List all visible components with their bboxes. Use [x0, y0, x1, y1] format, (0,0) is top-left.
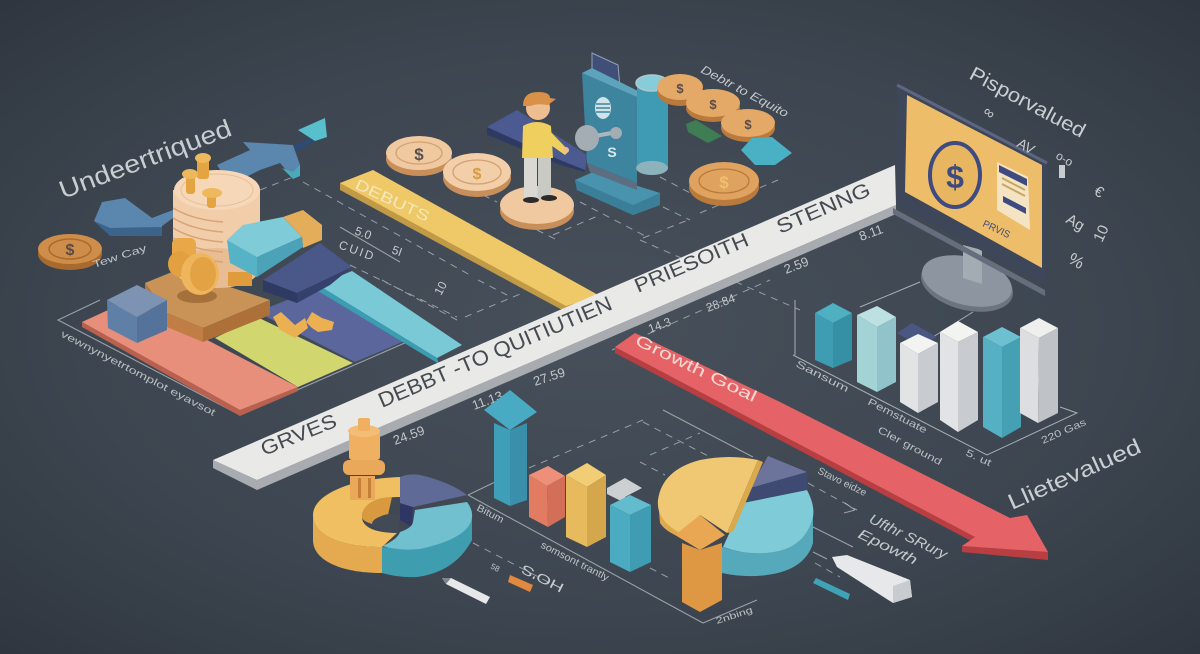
arrow upper section: [217, 142, 300, 185]
arrow tail head pointing left: [94, 198, 173, 236]
bar 2: [857, 306, 896, 392]
caption: chart numbers: 10: [431, 279, 450, 297]
icon: teal folded block: [227, 210, 322, 277]
bottom numbers: 24.59: [391, 423, 427, 448]
icon: person on coin: [500, 92, 574, 230]
arrow navy neck: [293, 133, 323, 151]
yellow band: Debuts: DEBUTS: [352, 176, 432, 225]
right chart captions: 5. ut: [964, 448, 993, 469]
coins right of machine: [657, 74, 775, 206]
icon: coin stack: [168, 153, 260, 303]
right chart captions: [794, 359, 1088, 469]
bottom bar chart: [484, 390, 651, 572]
solid axis lines: [58, 227, 855, 623]
coins right of machine: $: [709, 97, 717, 112]
icon: left coin: [38, 234, 102, 270]
monitor side glyphs: ∞: [979, 103, 999, 123]
band numbers: 8.11: [857, 221, 885, 244]
bottom chart captions: somsont trantly: [539, 540, 610, 584]
caption: chart numbers: [337, 224, 450, 297]
monitor side glyphs: Ag: [1063, 211, 1087, 235]
bottom chart captions: Bitum: [475, 503, 505, 526]
caption: Tew Cay: Tew Cay: [92, 243, 148, 271]
pencil icons: [442, 575, 533, 604]
band numbers: 28.84: [704, 291, 737, 315]
icon: small green and teal pieces: [686, 120, 792, 165]
bottom chart footer text: 2nbing: [715, 605, 754, 626]
label: Undervalued: Llietevalued: [1004, 434, 1145, 515]
bottom numbers: 27.59: [531, 365, 567, 389]
stepped navy block: [263, 243, 352, 303]
monitor side glyphs: €: [1091, 183, 1107, 202]
monitor side glyphs: o-o: [1054, 148, 1076, 169]
orange plinth: [145, 270, 270, 342]
icon: blue tray: [487, 110, 587, 172]
gold trinkets on stack: [182, 153, 222, 208]
coins row: $: [414, 145, 424, 164]
band numbers: [646, 221, 885, 336]
bar 1: [815, 303, 852, 368]
bar 5: [983, 327, 1021, 438]
lime slab: [215, 317, 353, 387]
coins right of machine: $: [719, 173, 729, 192]
main white diagonal band: DEBBT -TO QUITIUTIEN: [375, 292, 616, 413]
label: Overvalued: Pisporvalued: [966, 63, 1089, 143]
orange arrow: [675, 515, 725, 612]
coins right of machine: $: [744, 117, 752, 132]
yellow band: Debuts: [340, 170, 600, 312]
main white diagonal band: PRIESOITH: [631, 229, 752, 298]
arrow teal tip: [298, 118, 327, 141]
main white diagonal band: STENNG: [773, 179, 874, 239]
right chart captions: 220 Gas: [1040, 417, 1088, 447]
coins row: [386, 136, 511, 197]
monitor side glyphs: AV: [1014, 135, 1038, 158]
gold pile: [168, 238, 252, 303]
caption: Debt to Equity: Debtr to Equito: [699, 62, 791, 120]
arrow teal accent: [282, 165, 300, 179]
bottom numbers: [391, 365, 567, 448]
blue cube: [107, 285, 167, 343]
icon: small gold pieces: [273, 312, 334, 338]
bottom chart captions: [475, 503, 610, 584]
red arrow: Growth Goal: Growth Goal: [632, 332, 759, 406]
icon: monitor: PRVIS: [981, 219, 1012, 241]
right chart captions: Sansum: [794, 359, 850, 395]
rocket and pen icons: [813, 555, 912, 603]
navy slab: [257, 288, 407, 362]
right bar chart: [793, 282, 1077, 455]
icon: teal machine: [575, 53, 668, 215]
main white diagonal band: [213, 165, 896, 490]
caption: Ultra-Slurry Growth: [856, 510, 951, 568]
navy slab behind: [897, 323, 937, 347]
donut chart left: [313, 474, 472, 577]
caption: Ultra-Slurry Growth: Ufthr SRury: [867, 510, 951, 562]
caption: Save rate: Stavo eidze: [816, 466, 869, 499]
icon: teal machine: S: [607, 144, 617, 160]
caption: upside-down HOS: HO'S: [518, 561, 566, 596]
bar 4: [940, 321, 978, 432]
coins row: $: [473, 166, 482, 183]
caption: chart numbers: 5I: [390, 243, 404, 259]
band numbers: 14.3: [646, 315, 673, 336]
teal bar: [610, 495, 651, 572]
yellow bar: [566, 463, 606, 547]
monitor side glyphs: %: [1065, 249, 1088, 273]
caption: small 58: 58: [489, 562, 502, 574]
red bar: [529, 466, 565, 527]
caption: left axis text: vewnynyetrtomplot eyavsot: [59, 329, 217, 419]
icon: left coin: $: [66, 242, 75, 259]
band numbers: 2.59: [782, 254, 811, 277]
caption: Ultra-Slurry Growth: Epowth: [856, 525, 920, 568]
icon: monitor: [893, 85, 1047, 321]
icon: orange tower: [343, 418, 385, 500]
coins right of machine: $: [676, 81, 684, 96]
bar 3: [900, 334, 938, 413]
monitor stand: [915, 245, 1019, 321]
left chart base: coloured platform: [82, 243, 462, 416]
right chart captions: Pemstuate: [866, 397, 929, 436]
up arrow: [484, 390, 537, 506]
monitor side glyphs: [979, 103, 1113, 273]
arrow: blue underpriced: [94, 118, 327, 236]
icon: monitor: $: [946, 159, 964, 195]
caption: chart numbers: 5.0: [353, 224, 374, 243]
pie chart right: [658, 456, 813, 576]
bottom numbers: 11.13: [470, 388, 505, 413]
dashed guide lines: [260, 177, 857, 583]
red arrow: Growth Goal: [615, 332, 1048, 560]
red slab: [82, 322, 298, 416]
right chart captions: Cler ground: [876, 425, 943, 468]
teal slab: [318, 271, 462, 358]
monitor side glyphs: 10: [1090, 222, 1113, 245]
bar 6: [1020, 318, 1058, 423]
main white diagonal band: GRVES: [258, 410, 340, 461]
caption: chart numbers: CUID: [337, 238, 376, 263]
grey piece: [607, 478, 642, 503]
label: Underpriced: Undeertriqued: [55, 114, 235, 205]
